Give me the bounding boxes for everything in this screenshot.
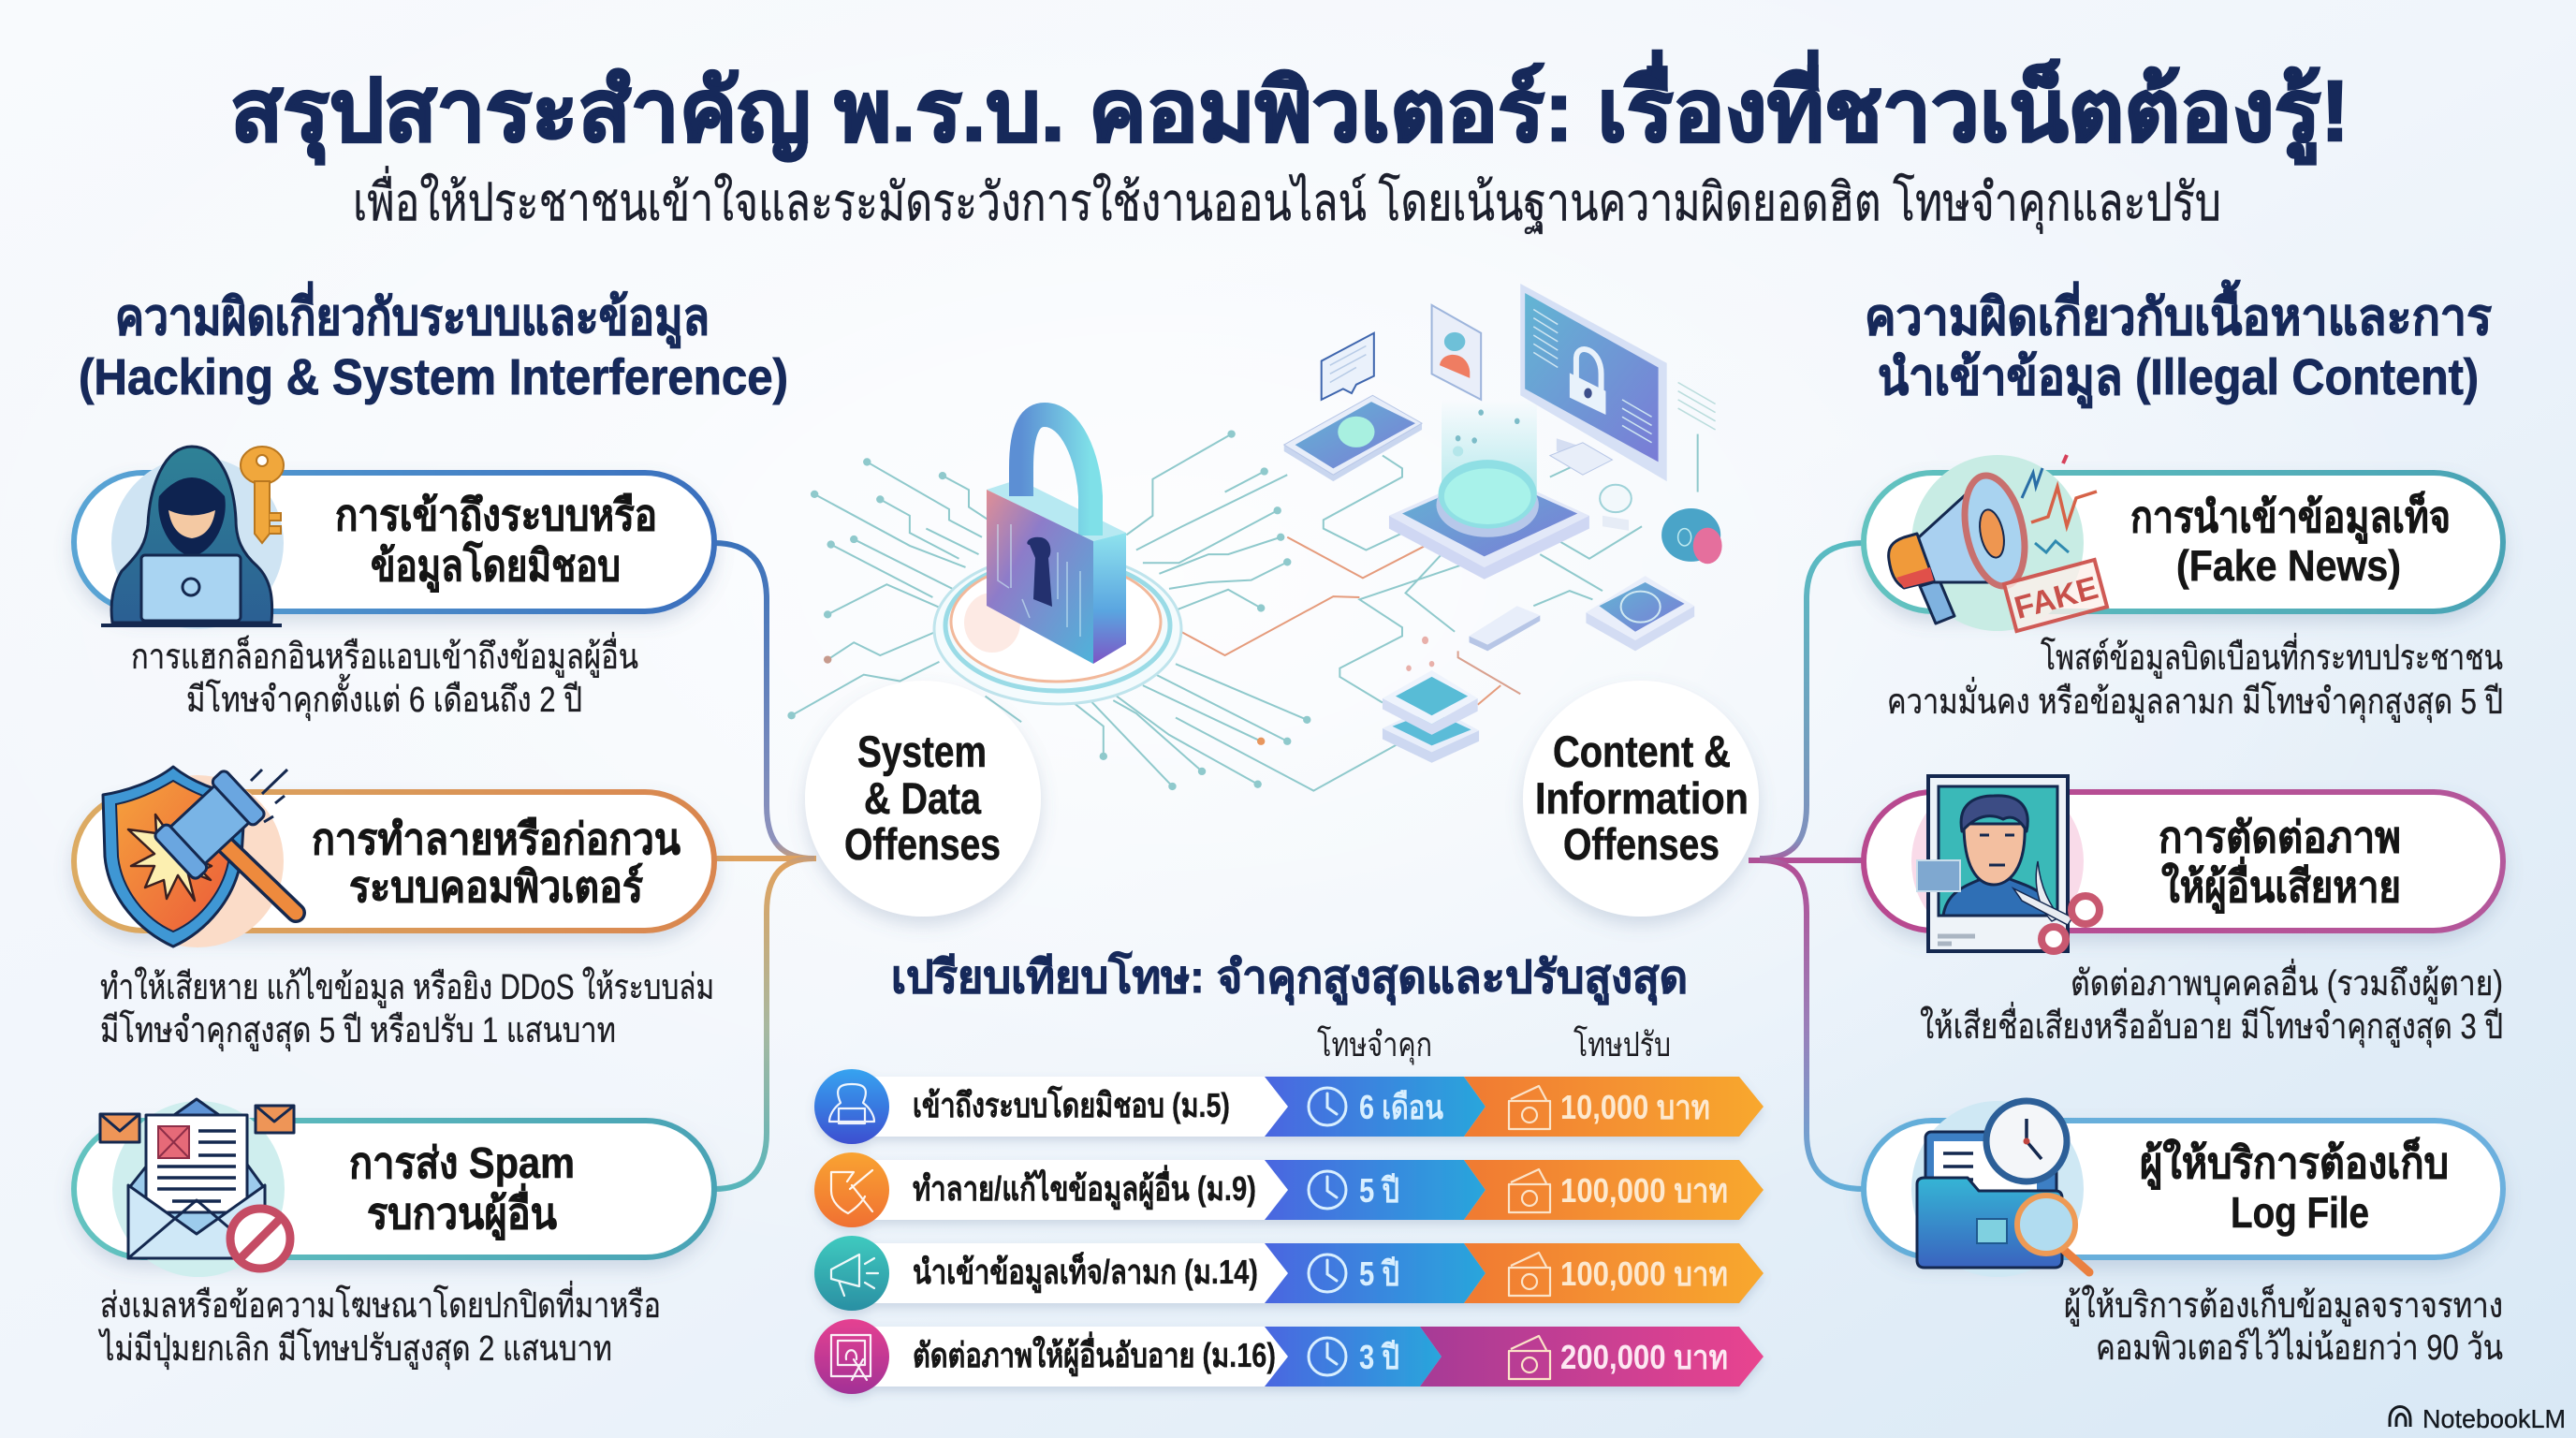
panel: fake news xyxy=(1864,455,2503,723)
hub: system & data offenses xyxy=(805,681,1041,917)
hub: system & data offenses: Offenses xyxy=(844,819,1001,869)
card title: ผู้ให้บริการต้องเก็บ xyxy=(2140,1137,2449,1190)
card title xyxy=(312,814,681,911)
hub: content & information offenses: Information xyxy=(1535,773,1749,823)
central illustration: circuit lock and devices xyxy=(787,284,1722,791)
heading: content offenses: นำเข้าข้อมูล (Illegal Content) xyxy=(1878,349,2479,408)
card description xyxy=(131,632,638,721)
heading: content offenses: ความผิดเกี่ยวกับเนื้อหาและการ xyxy=(1865,280,2492,345)
connectors: right tree xyxy=(1749,543,1864,1189)
row: section 5: 10,000 บาท xyxy=(1560,1088,1710,1126)
connectors: left tree xyxy=(714,543,816,1189)
card title: ระบบคอมพิวเตอร์ xyxy=(349,862,643,911)
hub: content & information offenses: Content & xyxy=(1553,726,1731,776)
padlock xyxy=(987,415,1126,664)
title: สรุปสาระสำคัญ พ.ร.บ. คอมพิวเตอร์: เรื่องที่ชาวเน็ตต้องรู้! xyxy=(230,50,2349,165)
heading: system offenses xyxy=(79,281,788,405)
card title: การตัดต่อภาพ xyxy=(2159,813,2401,861)
heading: system offenses: (Hacking & System Interference) xyxy=(79,349,788,405)
hub: system & data offenses: System xyxy=(857,726,987,776)
icon: megaphone and fake stamp xyxy=(1889,455,2107,631)
icon: shield and hammer xyxy=(103,767,296,947)
heading: system offenses: ความผิดเกี่ยวกับระบบและข้อมูล xyxy=(115,281,710,348)
panel: unauthorized access xyxy=(74,447,714,721)
card title: (Fake News) xyxy=(2176,541,2401,590)
row: section 5: 6 เดือน xyxy=(1359,1088,1443,1126)
row: section 14: 5 ปี xyxy=(1359,1255,1399,1293)
card description: มีโทษจำคุกสูงสุด 5 ปี หรือปรับ 1 แสนบาท xyxy=(100,1009,616,1051)
card title: ข้อมูลโดยมิชอบ xyxy=(371,540,621,593)
card title xyxy=(2140,1137,2449,1237)
circuit traces xyxy=(787,430,1698,791)
card description: ทำให้เสียหาย แก้ไขข้อมูล หรือยิง DDoS ให้ระบบล่ม xyxy=(100,967,714,1008)
card title: การนำเข้าข้อมูลเท็จ xyxy=(2130,491,2451,544)
icon: megaphone and fake stamp: FAKE xyxy=(2011,570,2101,626)
card description: ส่งเมลหรือข้อความโฆษณาโดยปกปิดที่มาหรือ xyxy=(100,1281,661,1326)
icon: edited photo and scissors xyxy=(1911,775,2100,951)
row: section 9: ทำลาย/แก้ไขข้อมูลผู้อื่น (ม.9) xyxy=(913,1165,1256,1211)
card title xyxy=(349,1138,575,1240)
row: section 5: เข้าถึงระบบโดยมิชอบ (ม.5) xyxy=(913,1085,1230,1124)
comparison table xyxy=(814,950,1764,1394)
hub: system & data offenses: & Data xyxy=(864,773,982,823)
card title: Log File xyxy=(2231,1188,2369,1237)
card description: การแฮกล็อกอินหรือแอบเข้าถึงข้อมูลผู้อื่น xyxy=(131,632,638,678)
table heading: เปรียบเทียบโทษ: จำคุกสูงสุดและปรับสูงสุด xyxy=(891,950,1688,1005)
card title: การส่ง Spam xyxy=(349,1138,575,1187)
card description xyxy=(1920,959,2503,1048)
row: section 14 xyxy=(814,1236,1764,1311)
card description xyxy=(2064,1284,2503,1368)
row: section 9: 5 ปี xyxy=(1359,1171,1399,1210)
row: section 14: นำเข้าข้อมูลเท็จ/ลามก (ม.14) xyxy=(913,1251,1258,1294)
card description: ตัดต่อภาพบุคคลอื่น (รวมถึงผู้ตาย) xyxy=(2071,959,2503,1005)
icon: folder clock magnifier xyxy=(1911,1101,2089,1277)
row: section 16 xyxy=(814,1319,1764,1394)
row: section 16: 3 ปี xyxy=(1359,1338,1399,1376)
column label: fine: โทษปรับ xyxy=(1573,1025,1671,1064)
card description: มีโทษจำคุกตั้งแต่ 6 เดือนถึง 2 ปี xyxy=(186,673,582,721)
panel: image manipulation xyxy=(1864,775,2503,1048)
panel: system damage xyxy=(74,767,714,1051)
card description xyxy=(100,967,714,1051)
icon: hacker with key xyxy=(101,447,284,629)
panel: log file xyxy=(1864,1101,2503,1368)
card description xyxy=(98,1281,661,1370)
floating devices xyxy=(1284,284,1722,763)
row: section 14: 100,000 บาท xyxy=(1560,1255,1728,1293)
card title xyxy=(2130,491,2451,590)
row: section 16: 200,000 บาท xyxy=(1560,1338,1728,1376)
icon: envelope and no sign xyxy=(100,1099,294,1277)
card title: ให้ผู้อื่นเสียหาย xyxy=(2161,857,2401,914)
hub: content & information offenses xyxy=(1523,681,1759,917)
card title xyxy=(2159,813,2401,914)
card description: ไม่มีปุ่มยกเลิก มีโทษปรับสูงสุด 2 แสนบาท xyxy=(98,1328,612,1370)
card title: การเข้าถึงระบบหรือ xyxy=(335,491,657,539)
row: section 5 xyxy=(814,1069,1764,1144)
row: section 9: 100,000 บาท xyxy=(1560,1171,1728,1210)
panel: spam xyxy=(74,1099,714,1370)
card title: รบกวนผู้อื่น xyxy=(367,1183,557,1240)
card title xyxy=(335,491,657,593)
row: section 16: ตัดต่อภาพให้ผู้อื่นอับอาย (ม.16) xyxy=(913,1331,1276,1377)
row: section 9 xyxy=(814,1152,1764,1227)
lock ring xyxy=(934,554,1181,704)
column label: prison: โทษจำคุก xyxy=(1317,1025,1432,1065)
card description xyxy=(1887,633,2503,723)
logo: NotebookLM: NotebookLM xyxy=(2422,1404,2566,1433)
hub: content & information offenses: Offenses xyxy=(1563,819,1720,869)
card title: การทำลายหรือก่อกวน xyxy=(312,814,681,863)
heading: content offenses xyxy=(1865,280,2492,408)
